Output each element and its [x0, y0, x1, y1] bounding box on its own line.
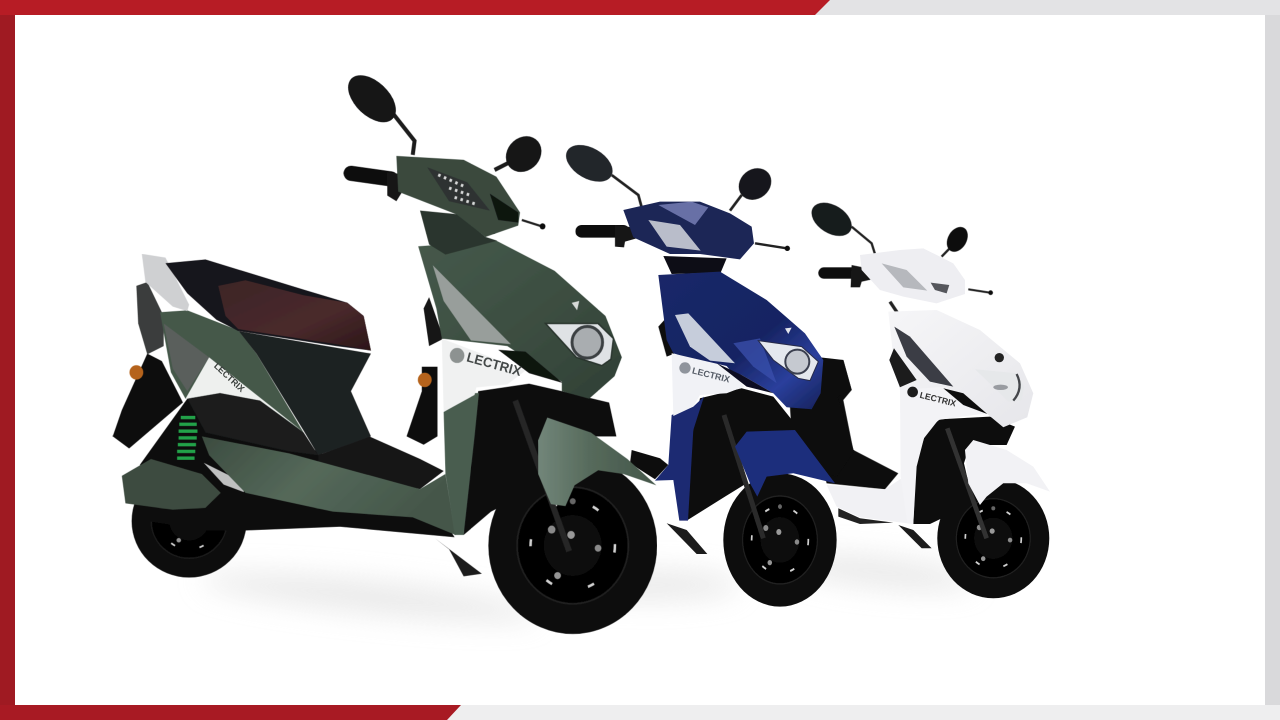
green scooter tail lamp: [136, 282, 164, 354]
white scooter vent: [943, 388, 987, 414]
green scooter badge: [572, 301, 579, 310]
green scooter handlebar: [351, 172, 545, 229]
green scooter lower body: [202, 436, 456, 535]
green scooter headset light: [427, 167, 490, 211]
blue scooter headset: [623, 202, 754, 259]
white scooter under-seat and floor: [813, 302, 898, 489]
green scooter rear body: [160, 310, 304, 433]
blue scooter white panel: [672, 353, 744, 416]
blue scooter logo: [679, 362, 731, 385]
blue scooter badge: [785, 328, 792, 334]
frame: top grey bar: [815, 0, 1280, 15]
white scooter logo: LECTRIX: [919, 390, 957, 409]
blue scooter headset light: [648, 220, 701, 251]
green scooter vent: [498, 350, 563, 383]
blue scooter leg shield: [655, 397, 704, 521]
blue scooter windscreen: [658, 202, 708, 225]
white scooter lower body: [827, 478, 913, 524]
green scooter silver panel: [433, 265, 511, 344]
green scooter lower side black: [187, 393, 318, 455]
green scooter white panel: [442, 339, 525, 412]
white scooter handlebar: [824, 265, 993, 295]
green scooter rear black behind shield: [424, 297, 444, 346]
green scooter kickstand: [435, 538, 482, 576]
white scooter fender: [965, 440, 1050, 505]
blue scooter front wheel: [723, 473, 837, 607]
scooter: white: [806, 196, 1050, 598]
blue scooter fork: [724, 415, 763, 538]
white scooter black side patch: [889, 348, 917, 387]
blue scooter vent: [717, 363, 773, 393]
white scooter fork: [947, 428, 987, 538]
white scooter headset: [860, 248, 965, 303]
white scooter front shield: [888, 310, 1033, 427]
scooter: green: [113, 66, 657, 634]
frame: bottom red bar: [0, 705, 461, 720]
blue scooter rear black body: [630, 317, 675, 479]
white scooter leg shield: [900, 387, 987, 524]
green scooter headset vent: [490, 194, 518, 223]
blue scooter front shield: [658, 272, 823, 409]
blue scooter handlebar: [582, 225, 790, 251]
white scooter headlight: [975, 369, 1024, 402]
green scooter fork: [515, 401, 569, 551]
green scooter white sticker: [185, 357, 302, 431]
white scooter dark side panel: [894, 327, 953, 387]
ground shadows: [199, 548, 976, 630]
blue scooter under-seat: [790, 357, 854, 477]
green scooter front bracket: [407, 367, 437, 445]
frame: top red bar: [0, 0, 830, 15]
white scooter headset vent: [931, 283, 949, 293]
blue scooter inner fork area: [686, 388, 800, 521]
blue scooter logo: LECTRIX: [691, 366, 731, 385]
green scooter rear chassis: [136, 399, 455, 537]
blue scooter neck: [663, 256, 727, 274]
white scooter front wheel: [937, 478, 1049, 598]
green scooter rear wheel: [132, 465, 247, 577]
blue scooter silver panel: [675, 313, 735, 363]
green scooter inner fork area: [464, 384, 616, 535]
frame: left red bar: [0, 0, 15, 720]
green scooter leg: [444, 393, 479, 535]
green scooter spring: [177, 418, 197, 458]
green scooter seat: [165, 259, 371, 351]
white scooter kickstand: [898, 525, 932, 548]
blue scooter shield highlight: [733, 338, 777, 383]
green scooter silver tail: [142, 254, 189, 311]
green scooter fender: [538, 418, 656, 506]
green scooter rear hugger: [122, 459, 221, 510]
green scooter neck: [420, 211, 497, 255]
green scooter front wheel: [488, 457, 657, 634]
green scooter under-seat black: [238, 331, 371, 455]
white scooter inner fork area: [913, 417, 1015, 524]
blue scooter mirrors: [560, 137, 778, 211]
white scooter logo: [907, 387, 957, 409]
green scooter rear grey panel: [164, 323, 209, 391]
green scooter headset: [396, 156, 520, 237]
green scooter front shield: [418, 241, 622, 399]
green scooter floorboard: [318, 436, 444, 489]
white scooter headset light: [882, 263, 927, 291]
blue scooter fender: [735, 430, 835, 497]
scooter: blue: [560, 137, 854, 607]
green scooter mirrors: [340, 66, 548, 179]
white scooter badge: [995, 353, 1004, 362]
white scooter chassis: [838, 508, 893, 524]
green scooter rear sticker logo: LECTRIX: [212, 361, 246, 394]
green scooter logo: LECTRIX: [465, 349, 523, 379]
frame: right grey bar: [1265, 0, 1280, 720]
blue scooter kickstand: [667, 523, 707, 554]
green scooter rear bracket: [113, 354, 183, 448]
white scooter mirrors: [806, 196, 972, 257]
blue scooter headlight: [758, 341, 818, 381]
frame: bottom grey bar: [445, 705, 1280, 720]
green scooter headlight: [545, 323, 613, 366]
green scooter footrest: [204, 463, 245, 492]
